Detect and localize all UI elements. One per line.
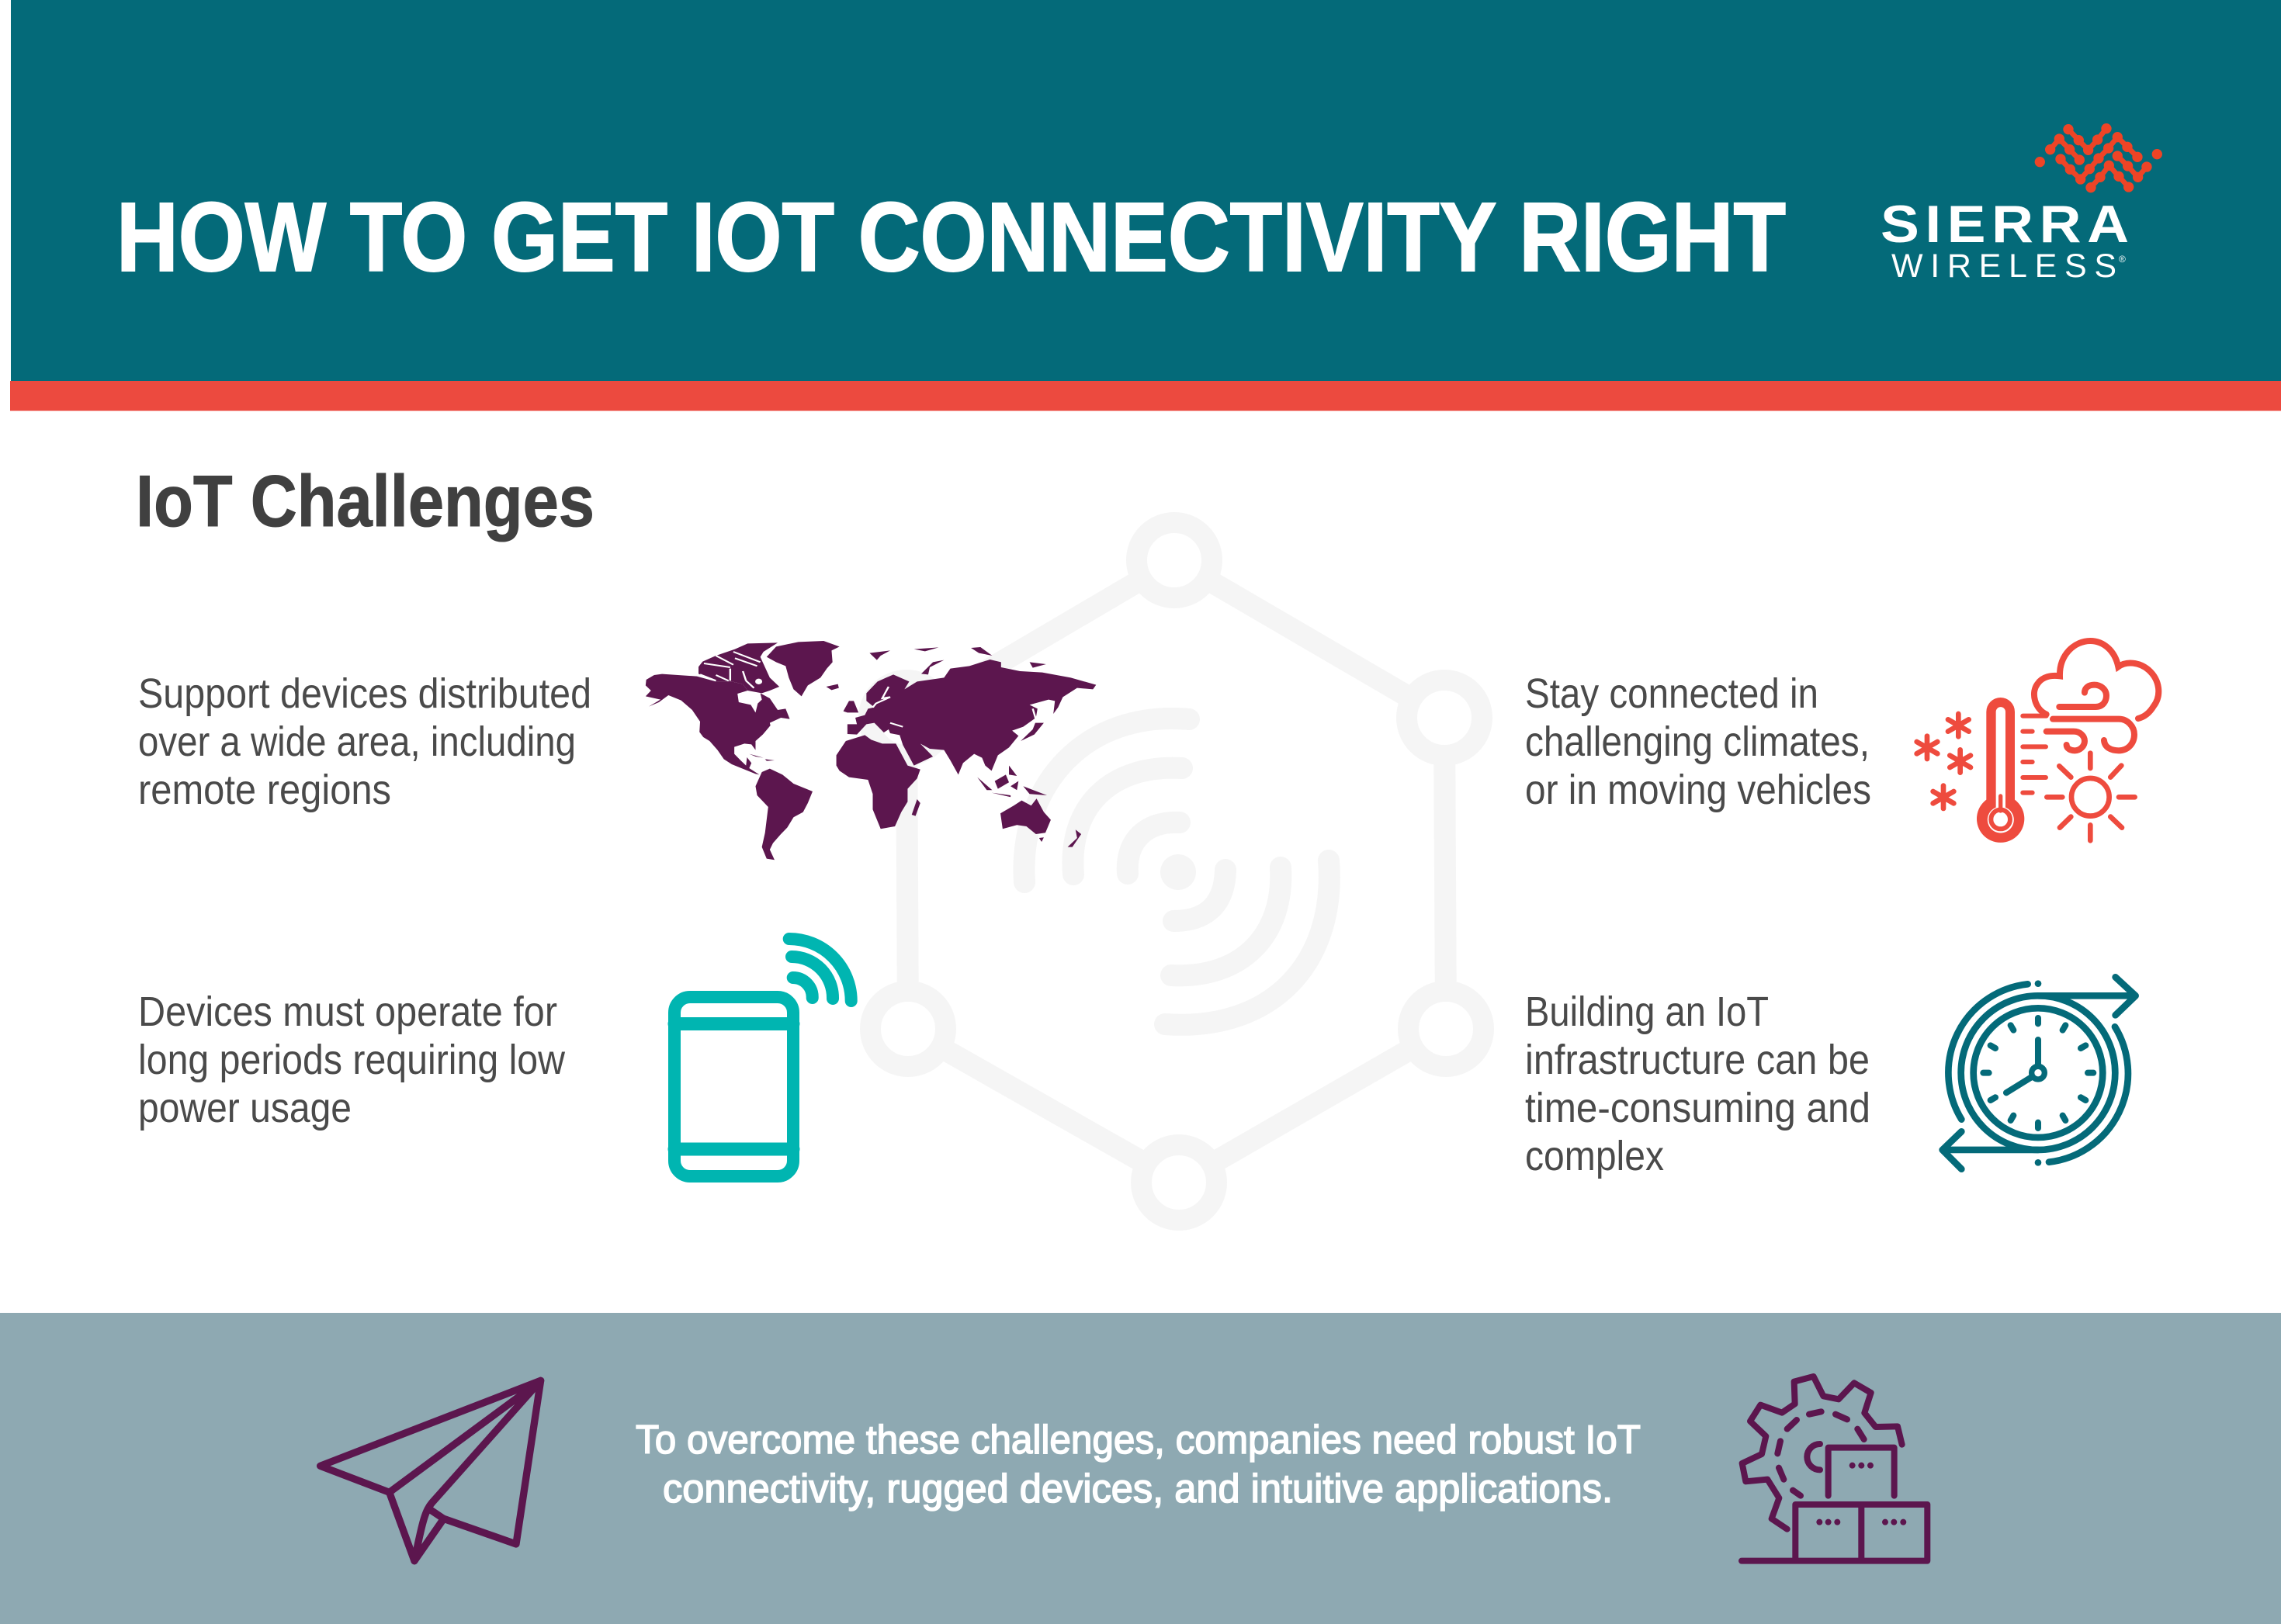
text block: low power: power usage xyxy=(138,1085,352,1131)
logo: Sierra Wireless: SIERRA xyxy=(1881,195,2129,254)
text block: wide area: over a wide area, including xyxy=(138,719,576,765)
text block: infrastructure: infrastructure can be xyxy=(1525,1037,1870,1083)
text block: low power xyxy=(138,989,566,1131)
logo: Sierra Wireless: ® xyxy=(2119,254,2126,265)
text block: climates: Stay connected in xyxy=(1525,670,1818,717)
text block: climates xyxy=(1525,670,1871,813)
icon: climate xyxy=(1917,641,2158,843)
title: HOW TO GET IOT CONNECTIVITY RIGHT xyxy=(116,182,1786,292)
icon: world map xyxy=(646,641,1096,860)
heading: IoT Challenges: IoT Challenges xyxy=(136,460,595,542)
icon: phone with signal xyxy=(674,939,851,1176)
text block: wide area: remote regions xyxy=(138,767,391,813)
text block: climates: or in moving vehicles xyxy=(1525,767,1871,813)
icon: paper plane xyxy=(321,1380,541,1561)
logo: Sierra Wireless xyxy=(1881,123,2162,285)
panel: conclusion band xyxy=(0,1313,2281,1624)
conclusion text: To overcome these challenges, companies need robust IoT xyxy=(636,1418,1641,1463)
text block: infrastructure xyxy=(1525,989,1870,1179)
icon: clock with arrows xyxy=(1943,977,2136,1169)
text block: low power: Devices must operate for xyxy=(138,989,557,1035)
text block: wide area: Support devices distributed xyxy=(138,670,591,717)
icon: gear and boxes xyxy=(1742,1376,1927,1561)
background watermark: hexagon network xyxy=(869,523,1484,1220)
text block: infrastructure: time-consuming and xyxy=(1525,1085,1870,1131)
conclusion text xyxy=(636,1418,1641,1511)
text block: low power: long periods requiring low xyxy=(138,1037,566,1083)
text block: wide area xyxy=(138,670,591,813)
text block: climates: challenging climates, xyxy=(1525,719,1870,765)
logo: Sierra Wireless: WIRELESS xyxy=(1891,248,2116,285)
panel: header banner xyxy=(10,0,2281,411)
text block: infrastructure: Building an IoT xyxy=(1525,989,1769,1035)
text block: infrastructure: complex xyxy=(1525,1133,1664,1179)
conclusion text: connectivity, rugged devices, and intuitive applications. xyxy=(663,1466,1613,1511)
